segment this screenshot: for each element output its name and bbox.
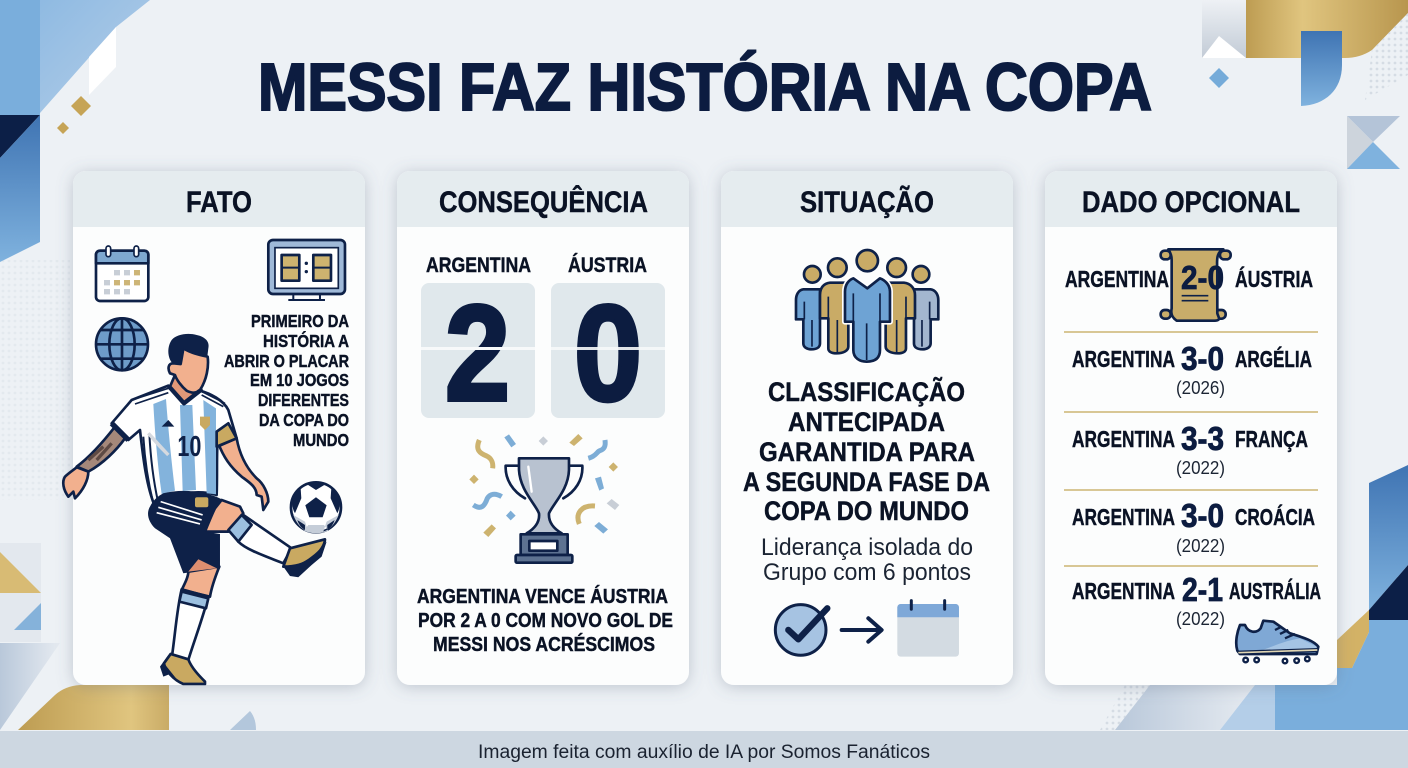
- panel: situação: [721, 171, 1013, 685]
- icon: group of people: [796, 250, 938, 362]
- text: situação headline: GARANTIDA PARA: [759, 437, 975, 467]
- decoration: bottom-left shapes: [0, 543, 256, 730]
- label: áustria: ÁUSTRIA: [568, 254, 647, 277]
- footer bar: [0, 731, 1408, 768]
- icon: scoreboard: [268, 240, 345, 300]
- row: argentina 3-0 argélia: [1072, 340, 1312, 398]
- text: fato description: DA COPA DO: [259, 410, 349, 430]
- panel: dado opcional: [1045, 171, 1337, 685]
- text: situação headline: A SEGUNDA FASE DA: [743, 467, 990, 497]
- text: fato description: MUNDO: [293, 430, 349, 450]
- score card: áustria 0: [551, 277, 665, 429]
- icon: football boot: [1236, 621, 1318, 663]
- panel: fato: [63, 171, 365, 685]
- text: consequência description: POR 2 A 0 COM NOVO GOL DE: [418, 610, 673, 632]
- row: argentina 3-3 frança: FRANÇA: [1235, 426, 1308, 452]
- row: argentina 3-0 argélia: ARGENTINA: [1072, 346, 1175, 372]
- label: argentina: ARGENTINA: [426, 254, 531, 277]
- row: argentina 3-0 croácia: CROÁCIA: [1235, 503, 1315, 530]
- row: argentina 3-0 argélia: (2026): [1176, 378, 1225, 398]
- row: argentina 2-0 áustria: ARGENTINA: [1065, 266, 1169, 292]
- row: argentina 2-1 austrália: ARGENTINA: [1072, 578, 1175, 604]
- text: fato description: PRIMEIRO DA: [251, 311, 349, 331]
- row: argentina 2-1 austrália: 2-1: [1182, 571, 1223, 608]
- text: situação headline: [743, 376, 990, 526]
- icon: calendar: [96, 246, 148, 301]
- title: MESSI FAZ HISTÓRIA NA COPA: [258, 50, 1152, 125]
- row: argentina 2-0 áustria: ÁUSTRIA: [1235, 265, 1313, 292]
- text: fato description: ABRIR O PLACAR: [224, 351, 349, 371]
- score card: argentina 2: 2: [445, 277, 510, 429]
- row: argentina 3-0 argélia: 3-0: [1181, 340, 1224, 377]
- text: shirt number: 10: [177, 431, 201, 463]
- text: consequência description: MESSI NOS ACRÉSCIMOS: [433, 633, 655, 656]
- text: fato description: [224, 311, 349, 450]
- heading: fato: FATO: [186, 186, 252, 219]
- decoration: top-left shapes: [0, 0, 150, 500]
- text: fato description: EM 10 JOGOS: [250, 370, 349, 390]
- text: fato description: HISTÓRIA A: [263, 330, 349, 351]
- row: argentina 2-0 áustria: [1065, 259, 1313, 296]
- heading: dado opcional: DADO OPCIONAL: [1082, 186, 1300, 219]
- row: argentina 3-3 frança: (2022): [1176, 458, 1225, 478]
- row: argentina 2-1 austrália: AUSTRÁLIA: [1229, 577, 1321, 604]
- row: argentina 3-3 frança: 3-3: [1181, 420, 1224, 457]
- row: argentina 3-0 croácia: [1072, 497, 1315, 556]
- panel: consequência: [397, 171, 689, 685]
- icon: globe: [96, 318, 148, 370]
- row: argentina 3-0 croácia: (2022): [1176, 536, 1225, 556]
- decoration: bottom-right shapes: [1100, 465, 1408, 730]
- row: argentina 3-0 argélia: ARGÉLIA: [1235, 345, 1312, 372]
- heading: consequência: CONSEQUÊNCIA: [439, 185, 648, 219]
- text: fato description: DIFERENTES: [258, 390, 349, 410]
- heading: situação: SITUAÇÃO: [800, 185, 934, 219]
- text: situação detail: Grupo com 6 pontos: [763, 559, 971, 586]
- row: argentina 3-0 croácia: ARGENTINA: [1072, 504, 1175, 530]
- row: argentina 3-3 frança: [1072, 420, 1308, 478]
- text: consequência description: [417, 585, 673, 656]
- icon: scroll: [1161, 249, 1231, 321]
- row: argentina 3-3 frança: ARGENTINA: [1072, 426, 1175, 452]
- text: situação headline: COPA DO MUNDO: [764, 496, 969, 526]
- decoration: top-right shapes: [1202, 0, 1408, 169]
- row: argentina 3-0 croácia: 3-0: [1181, 497, 1224, 534]
- score card: argentina 2: [421, 277, 535, 429]
- text: situação detail: [761, 534, 973, 586]
- icon: check, arrow and calendar: [775, 601, 959, 657]
- text: situação headline: CLASSIFICAÇÃO: [768, 376, 965, 407]
- row: argentina 2-0 áustria: 2-0: [1181, 259, 1224, 296]
- row: argentina 2-1 austrália: (2022): [1176, 609, 1225, 629]
- illustration: player kicking ball: [63, 334, 327, 684]
- text: consequência description: ARGENTINA VENCE ÁUSTRIA: [417, 585, 668, 608]
- icon: trophy with confetti: [469, 434, 619, 563]
- text: situação detail: Liderança isolada do: [761, 534, 973, 561]
- footer credit: Imagem feita com auxílio de IA por Somos Fanáticos: [478, 742, 930, 763]
- text: situação headline: ANTECIPADA: [788, 407, 945, 437]
- row: argentina 2-1 austrália: [1072, 571, 1321, 629]
- score card: áustria 0: 0: [574, 277, 642, 429]
- icon: soccer ball: [291, 482, 341, 533]
